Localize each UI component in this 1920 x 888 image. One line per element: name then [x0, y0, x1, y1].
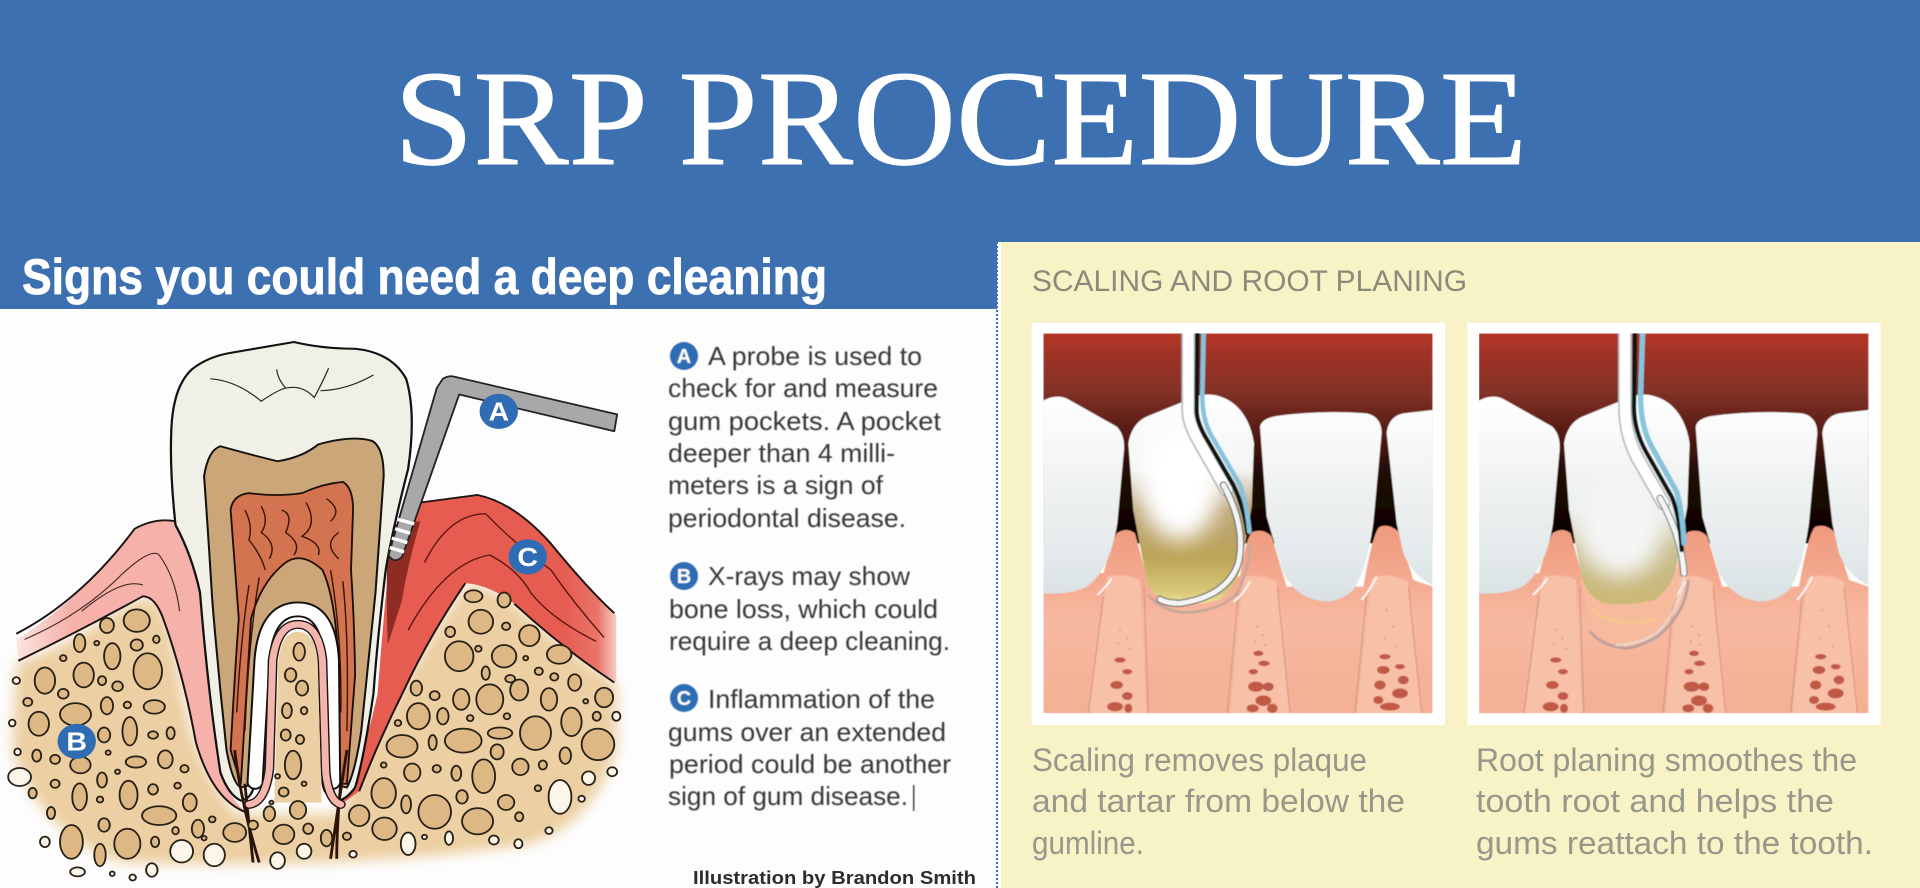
text block C: [668, 684, 951, 811]
panel: scaling and root planing: [1001, 242, 1920, 888]
caption: scaling: and tartar from below the: [1032, 783, 1405, 819]
bone pores: [23, 590, 614, 866]
text block A: A: [677, 346, 691, 368]
jaw bone: [12, 585, 616, 864]
marker A: [480, 394, 518, 429]
root nerves: [235, 750, 347, 862]
caption: scaling: [1032, 742, 1405, 861]
tooth anatomy illustration: [8, 342, 620, 880]
marker C: C: [517, 542, 538, 572]
caption: root planing: gums reattach to the tooth.: [1476, 825, 1873, 861]
text block C: sign of gum disease.: [668, 781, 908, 811]
marker B: B: [66, 727, 87, 756]
text block B: require a deep cleaning.: [669, 626, 950, 656]
text block B: [669, 561, 950, 656]
gum pocket outline: [1148, 543, 1251, 613]
text block A: periodontal disease.: [668, 503, 906, 533]
text block A: gum pockets. A pocket: [668, 406, 942, 436]
marker C: [509, 539, 547, 574]
text block C: period could be another: [669, 749, 951, 779]
marker B: [58, 724, 96, 759]
planed root below the gumline: [1582, 565, 1680, 624]
text block B: bone loss, which could: [669, 594, 938, 624]
illustration credit: Illustration by Brandon Smith: [693, 868, 976, 888]
text block C: gums over an extended: [668, 717, 946, 747]
text block A: check for and measure: [668, 373, 938, 403]
root planing instrument: [1617, 330, 1684, 645]
healthy gum: [16, 520, 245, 812]
panel heading: SCALING AND ROOT PLANING: [1032, 265, 1467, 298]
inflamed gum: [339, 495, 616, 806]
text block B: B: [677, 566, 691, 588]
text block A: [668, 341, 942, 533]
text block A: A probe is used to: [708, 341, 922, 371]
caption: root planing: Root planing smoothes the: [1476, 742, 1857, 778]
scaler instrument: [1160, 330, 1249, 603]
gum pocket outline: [1590, 580, 1688, 648]
tooth crown and roots: [171, 342, 412, 862]
inner white arch: [249, 609, 341, 804]
caption: scaling: gumline.: [1032, 825, 1144, 861]
heading band: Signs you could need a deep cleaning: [22, 249, 827, 305]
outer bone pores: [8, 677, 620, 880]
periodontal probe: [389, 376, 617, 560]
pulp: [231, 482, 355, 784]
text block A: deeper than 4 milli-: [668, 438, 895, 468]
text block A: meters is a sign of: [668, 470, 884, 500]
text block B: X-rays may show: [708, 561, 910, 591]
image frame: root planing: [1467, 323, 1881, 725]
caption: scaling: Scaling removes plaque: [1032, 742, 1367, 778]
image frame: scaling: [1032, 323, 1445, 725]
plaque ring on root: [1567, 502, 1686, 605]
caption: root planing: [1476, 742, 1873, 861]
marker A: A: [488, 397, 509, 426]
title banner: [0, 0, 1920, 242]
text block C: C: [677, 688, 691, 710]
caption: root planing: tooth root and helps the: [1476, 783, 1834, 819]
plaque on tooth: [1129, 445, 1254, 604]
title: SRP PROCEDURE: [394, 44, 1527, 194]
text block C: Inflammation of the: [708, 684, 935, 714]
panel: signs you could need a deep cleaning: [0, 242, 998, 888]
